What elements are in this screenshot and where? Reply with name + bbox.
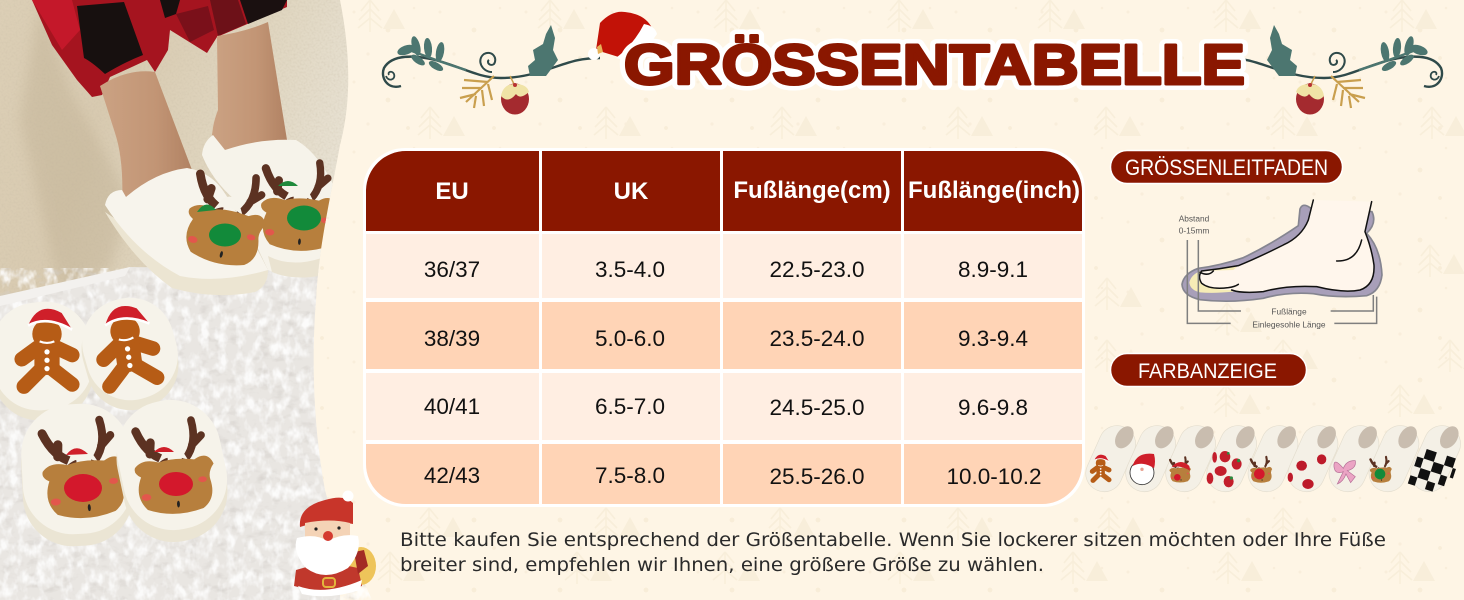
measure labels: Einlegesohle Länge — [1252, 319, 1326, 329]
slipper: gingerbread — [1080, 420, 1141, 497]
title decoration: right holly sprig — [1225, 25, 1442, 114]
colour swatches: nine slippers — [1080, 420, 1464, 497]
title: GRÖSSENTABELLE — [624, 33, 1245, 97]
wall — [0, 0, 348, 296]
row 36/37 — [366, 234, 1082, 298]
foot — [1199, 200, 1374, 292]
title decoration: left holly sprig — [383, 25, 600, 114]
row 40/41: 24.5-25.0 — [769, 395, 865, 420]
santa illustration — [294, 490, 376, 596]
icon: santa hat — [588, 12, 657, 62]
row 38/39: 9.3-9.4 — [958, 326, 1028, 351]
title: GRÖSSENTABELLE — [624, 33, 1245, 97]
row 38/39: 23.5-24.0 — [769, 326, 865, 351]
measure lines — [1187, 240, 1377, 323]
size table — [363, 148, 1085, 507]
row 40/41 — [366, 373, 1082, 440]
slipper: reindeer green nose — [1363, 420, 1425, 497]
row 36/37: 3.5-4.0 — [595, 257, 665, 282]
foot measurement diagram — [1179, 200, 1382, 329]
slipper: reindeer red nose brown — [1242, 420, 1304, 497]
white fluffy rug — [0, 267, 372, 600]
heading pill: size guide — [1110, 150, 1342, 184]
body — [294, 564, 362, 591]
slippers: red-nosed reindeer pair — [21, 400, 228, 546]
slipper: black checkerboard — [1405, 420, 1464, 497]
hat — [300, 498, 353, 527]
note text: Bitte kaufen Sie entsprechend der Größentabelle. Wenn Sie lockerer sitzen möchten oder Ihre Füße — [400, 529, 1386, 551]
face — [305, 520, 350, 542]
row 38/39: 38/39 — [424, 326, 480, 351]
heading pill: colour display: FARBANZEIGE — [1138, 359, 1277, 383]
row 38/39: 5.0-6.0 — [595, 326, 665, 351]
measure labels: Fußlänge — [1271, 306, 1307, 316]
row 42/43 — [366, 444, 1082, 504]
header row: Fußlänge(inch) — [908, 177, 1080, 204]
legs — [100, 22, 287, 205]
slipper: santa — [1120, 420, 1181, 497]
heading pill: colour display — [1110, 354, 1306, 386]
slipper: pink bow — [1323, 420, 1385, 497]
header row: Fußlänge(cm) — [733, 177, 891, 204]
heading pill: size guide: GRÖSSENLEITFADEN — [1125, 155, 1328, 180]
row 40/41: 6.5-7.0 — [595, 394, 665, 419]
sack — [346, 547, 376, 585]
note text — [400, 529, 1386, 576]
header row — [366, 151, 1082, 231]
header row: UK — [614, 178, 649, 205]
row 42/43: 42/43 — [424, 463, 480, 488]
row 40/41: 40/41 — [424, 394, 480, 419]
slippers: gingerbread pair — [0, 298, 178, 420]
row 36/37: 22.5-23.0 — [769, 257, 865, 282]
row 42/43: 10.0-10.2 — [946, 464, 1042, 489]
photo: slippers on a fluffy rug — [0, 0, 372, 600]
header row: EU — [435, 178, 469, 205]
note text: breiter sind, empfehlen wir Ihnen, eine größere Größe zu wählen. — [400, 554, 1044, 576]
slipper: reindeer red nose — [1160, 420, 1221, 497]
measure labels: 0-15mm — [1179, 226, 1209, 236]
slipper: right foot with green-nosed reindeer — [202, 135, 340, 278]
measure labels — [1179, 213, 1326, 329]
insole — [1182, 205, 1382, 301]
beard — [296, 535, 359, 575]
slipper: left foot with green-nosed reindeer — [105, 164, 276, 295]
row 42/43: 7.5-8.0 — [595, 463, 665, 488]
slipper: strawberries — [1201, 420, 1262, 497]
slipper: hearts — [1282, 420, 1344, 497]
row 38/39 — [366, 302, 1082, 369]
plaid pyjama trousers — [32, 0, 287, 97]
table frame — [363, 148, 1085, 507]
measure labels: Abstand — [1179, 213, 1210, 223]
row 36/37: 36/37 — [424, 257, 480, 282]
toe cushion — [1189, 266, 1237, 293]
row 42/43: 25.5-26.0 — [769, 464, 865, 489]
row 40/41: 9.6-9.8 — [958, 395, 1028, 420]
row 36/37: 8.9-9.1 — [958, 257, 1028, 282]
